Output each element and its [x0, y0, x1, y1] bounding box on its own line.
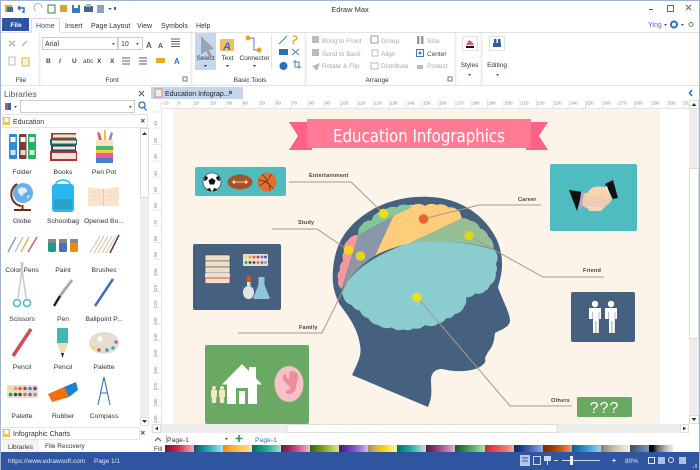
font group: Arial — [45, 41, 59, 48]
status bar: Page 1/1 — [94, 458, 120, 465]
icon: burner — [243, 275, 254, 299]
library labels — [5, 169, 124, 420]
arrange group: Arrange — [365, 77, 389, 84]
panel: career handshake — [550, 164, 637, 231]
icon: folder — [9, 134, 36, 159]
title bar: Edraw Max — [331, 5, 369, 14]
top ruler: 300 — [668, 100, 676, 106]
arrange group: Align — [381, 51, 396, 58]
arrange group: Send to Back — [322, 51, 361, 58]
library labels: Opened Bo... — [84, 218, 124, 225]
icon: pen — [54, 280, 72, 306]
basic tools group: Text — [222, 55, 234, 62]
library labels: Brushes — [92, 267, 117, 274]
left ruler: 90 — [153, 251, 158, 257]
infographic charts header — [2, 428, 144, 440]
top ruler: 10 — [194, 100, 200, 106]
basic tools group: A — [222, 41, 231, 53]
icon: compass — [98, 377, 110, 405]
left ruler: 70 — [153, 219, 158, 225]
arrange group: Group — [381, 38, 399, 45]
ribbon toolbar — [1, 32, 699, 86]
lobe: friend sage — [410, 218, 494, 249]
icon: schoolbag — [52, 180, 74, 212]
arrange group: Distribute — [381, 63, 409, 70]
panel: libraries: Education — [13, 119, 44, 126]
document tab strip: Education Infograp... — [165, 91, 230, 98]
font group: B — [46, 58, 51, 65]
basic tools group: Select — [196, 55, 215, 62]
library labels: Ballpoint P... — [85, 316, 123, 323]
left ruler: 40 — [153, 170, 158, 176]
lobe: others teal — [342, 241, 498, 330]
top ruler: 170 — [456, 100, 464, 106]
top ruler: 310 — [684, 100, 692, 106]
left ruler: 180 — [153, 398, 158, 406]
icon: globe — [11, 183, 33, 211]
icon: book stack — [205, 255, 230, 284]
panel: entertainment sports icons — [195, 167, 286, 196]
callout labels: Friend — [583, 268, 601, 274]
library labels: Compass — [90, 413, 119, 420]
icon: paint palette — [243, 254, 268, 266]
lobe: entertainment green — [358, 205, 412, 235]
font group: abc — [83, 58, 94, 65]
icon: palette — [89, 332, 119, 354]
panel: family icons — [205, 345, 309, 424]
top ruler: 290 — [652, 100, 660, 106]
arrange group: Center — [427, 51, 447, 58]
ribbon tabs: Insert — [65, 23, 83, 30]
top ruler: -10 — [162, 100, 169, 106]
left ruler: 170 — [153, 382, 158, 390]
panel: libraries: Libraries — [4, 89, 37, 99]
top ruler: 140 — [407, 100, 415, 106]
fill label: Fill — [154, 446, 163, 453]
page tabs: Page-1 — [167, 437, 189, 444]
title banner — [289, 119, 548, 150]
icon: books — [50, 133, 77, 161]
head silhouette — [333, 197, 510, 407]
top ruler — [151, 99, 692, 108]
top ruler: 280 — [635, 100, 643, 106]
top ruler: 270 — [619, 100, 627, 106]
font group: X — [110, 58, 115, 65]
library labels: Pencil — [13, 364, 32, 371]
icon: paint — [48, 239, 78, 252]
callout labels: Others — [551, 398, 570, 404]
left ruler: 120 — [153, 300, 158, 308]
right scrollbar — [689, 100, 699, 424]
callout labels: Career — [518, 197, 537, 203]
icon: red pencil — [13, 329, 31, 356]
font group: Font — [105, 77, 119, 84]
lobe: career yellow — [375, 204, 462, 256]
library labels: Pencil — [54, 364, 73, 371]
connector dots — [344, 209, 474, 302]
status bar — [1, 452, 699, 470]
left ruler: 30 — [153, 153, 158, 159]
colour palette — [165, 445, 673, 452]
panel: study icons — [193, 244, 281, 310]
arrange group: Protect — [427, 63, 448, 70]
icon: flask — [253, 277, 270, 299]
arrange group: Size — [427, 38, 440, 45]
top ruler: 40 — [243, 100, 249, 106]
top ruler: 120 — [374, 100, 382, 106]
title bar — [5, 4, 691, 14]
left ruler: 100 — [153, 268, 158, 276]
left ruler: 50 — [153, 186, 158, 192]
left ruler: 140 — [153, 333, 158, 341]
top ruler: 50 — [260, 100, 266, 106]
document tab strip — [151, 87, 692, 99]
font group: A — [146, 41, 152, 50]
icon: basketball — [258, 172, 276, 192]
icon: pen pot — [96, 129, 113, 163]
infographic charts header: Infographic Charts — [13, 431, 71, 438]
icon: watercolour palette — [7, 385, 38, 398]
top ruler: 150 — [423, 100, 431, 106]
icon: figure right — [605, 301, 617, 333]
top ruler: 130 — [390, 100, 398, 106]
icon: scissors — [14, 262, 30, 306]
icon: brushes — [90, 235, 119, 253]
library labels: Books — [54, 169, 73, 176]
page tabs: Page-1 — [255, 437, 277, 444]
library labels: Palette — [93, 364, 115, 371]
top ruler: 100 — [341, 100, 349, 106]
styles and editing buttons: Styles — [461, 62, 479, 69]
top ruler: 0 — [178, 100, 181, 106]
status bar: https://www.edrawsoft.com — [8, 458, 85, 465]
bottom panel tabs — [3, 440, 85, 452]
top ruler: 80 — [309, 100, 315, 106]
icon: rubber — [48, 382, 78, 402]
panel: friend figures — [571, 292, 635, 342]
top ruler: 220 — [537, 100, 545, 106]
library labels: Color Pens — [5, 267, 39, 274]
top ruler: 180 — [472, 100, 480, 106]
library labels: Pen — [57, 316, 69, 323]
top ruler: 70 — [292, 100, 298, 106]
icon: football — [228, 174, 252, 190]
left ruler: 130 — [153, 317, 158, 325]
library scrollbar — [140, 128, 149, 426]
head and brain — [333, 197, 510, 407]
left ruler: 190 — [153, 415, 158, 423]
top ruler: 160 — [439, 100, 447, 106]
arrange group: Rotate & Flip — [322, 63, 360, 70]
styles and editing buttons: Editing — [487, 62, 507, 69]
icon: opened book — [88, 187, 119, 206]
ribbon tabs: Home — [36, 23, 55, 30]
icon: handshake — [569, 180, 618, 211]
library labels: Paint — [55, 267, 71, 274]
font group: A — [158, 43, 163, 50]
panel: libraries — [1, 86, 151, 452]
left ruler — [151, 108, 162, 424]
icon: two figures — [211, 386, 225, 403]
library labels: Pen Pot — [92, 169, 116, 176]
bottom panel tabs: Libraries — [8, 444, 34, 451]
icon: ballpoint pen — [95, 279, 113, 306]
library labels: Palette — [11, 413, 33, 420]
callout labels — [298, 173, 601, 404]
callout labels: Entertainment — [309, 173, 349, 179]
file group: File — [16, 77, 27, 84]
page tabs — [155, 435, 277, 444]
library labels: Folder — [12, 169, 32, 176]
font group: A — [174, 57, 180, 66]
font group: 10 — [121, 41, 129, 48]
bottom panel tabs: File Recovery — [45, 443, 85, 450]
left ruler: 20 — [153, 137, 158, 143]
top ruler: 250 — [586, 100, 594, 106]
callout labels: Study — [298, 220, 315, 226]
library labels: Scissors — [9, 316, 35, 323]
file group — [9, 41, 29, 84]
top ruler: 60 — [276, 100, 282, 106]
font group: X — [97, 58, 102, 65]
font group: U — [72, 58, 77, 65]
left ruler: 10 — [153, 120, 158, 126]
title banner: Education Infographics — [333, 126, 505, 147]
icon: embryo — [274, 366, 304, 402]
left ruler: 150 — [153, 349, 158, 357]
ribbon tabs: Help — [196, 23, 211, 30]
top ruler: 110 — [358, 100, 366, 106]
library labels: Schoolbag — [47, 218, 79, 225]
arrange group: Bring to Front — [322, 38, 362, 45]
left ruler: 80 — [153, 235, 158, 241]
left ruler: 160 — [153, 366, 158, 374]
top ruler: 260 — [603, 100, 611, 106]
top ruler: 30 — [227, 100, 233, 106]
top ruler: 190 — [488, 100, 496, 106]
ribbon tabs: File — [10, 22, 22, 29]
left ruler: 110 — [153, 284, 158, 292]
leader lines — [238, 182, 604, 406]
page canvas — [173, 109, 660, 424]
basic tools group: Basic Tools — [234, 77, 267, 84]
brain lobes — [338, 204, 498, 330]
horizontal scrollbar — [151, 424, 689, 433]
panel: others — [577, 397, 632, 417]
ribbon tabs: Symbols — [161, 23, 188, 30]
top ruler: 240 — [570, 100, 578, 106]
lobe: study grey — [342, 216, 393, 290]
top ruler: 230 — [554, 100, 562, 106]
icon: figure left — [589, 301, 601, 333]
library labels: Rubber — [52, 413, 75, 420]
top ruler: 90 — [325, 100, 331, 106]
styles and editing buttons — [461, 36, 507, 76]
ribbon tabs — [2, 18, 693, 32]
basic tools group — [195, 33, 301, 84]
top ruler: 200 — [505, 100, 513, 106]
icon: soccer ball — [203, 173, 221, 192]
panel: others: ??? — [590, 400, 619, 417]
ribbon tabs: Page Layout — [91, 23, 130, 30]
top ruler: 20 — [211, 100, 217, 106]
arrange group — [312, 36, 452, 84]
basic tools group: Connector — [240, 55, 270, 62]
callout labels: Family — [299, 325, 318, 331]
left ruler: 60 — [153, 202, 158, 208]
top ruler: 210 — [521, 100, 529, 106]
ribbon tabs: Ying — [648, 22, 662, 29]
lobe: family pink — [338, 235, 358, 289]
icon: color pens — [8, 237, 37, 252]
status bar: 80% — [625, 458, 638, 465]
ribbon tabs: View — [137, 23, 153, 30]
font group — [42, 38, 187, 84]
font group: I — [59, 58, 61, 65]
icon: teal pencil — [57, 328, 68, 358]
library labels: Globe — [13, 218, 31, 225]
icon: house — [222, 364, 262, 404]
